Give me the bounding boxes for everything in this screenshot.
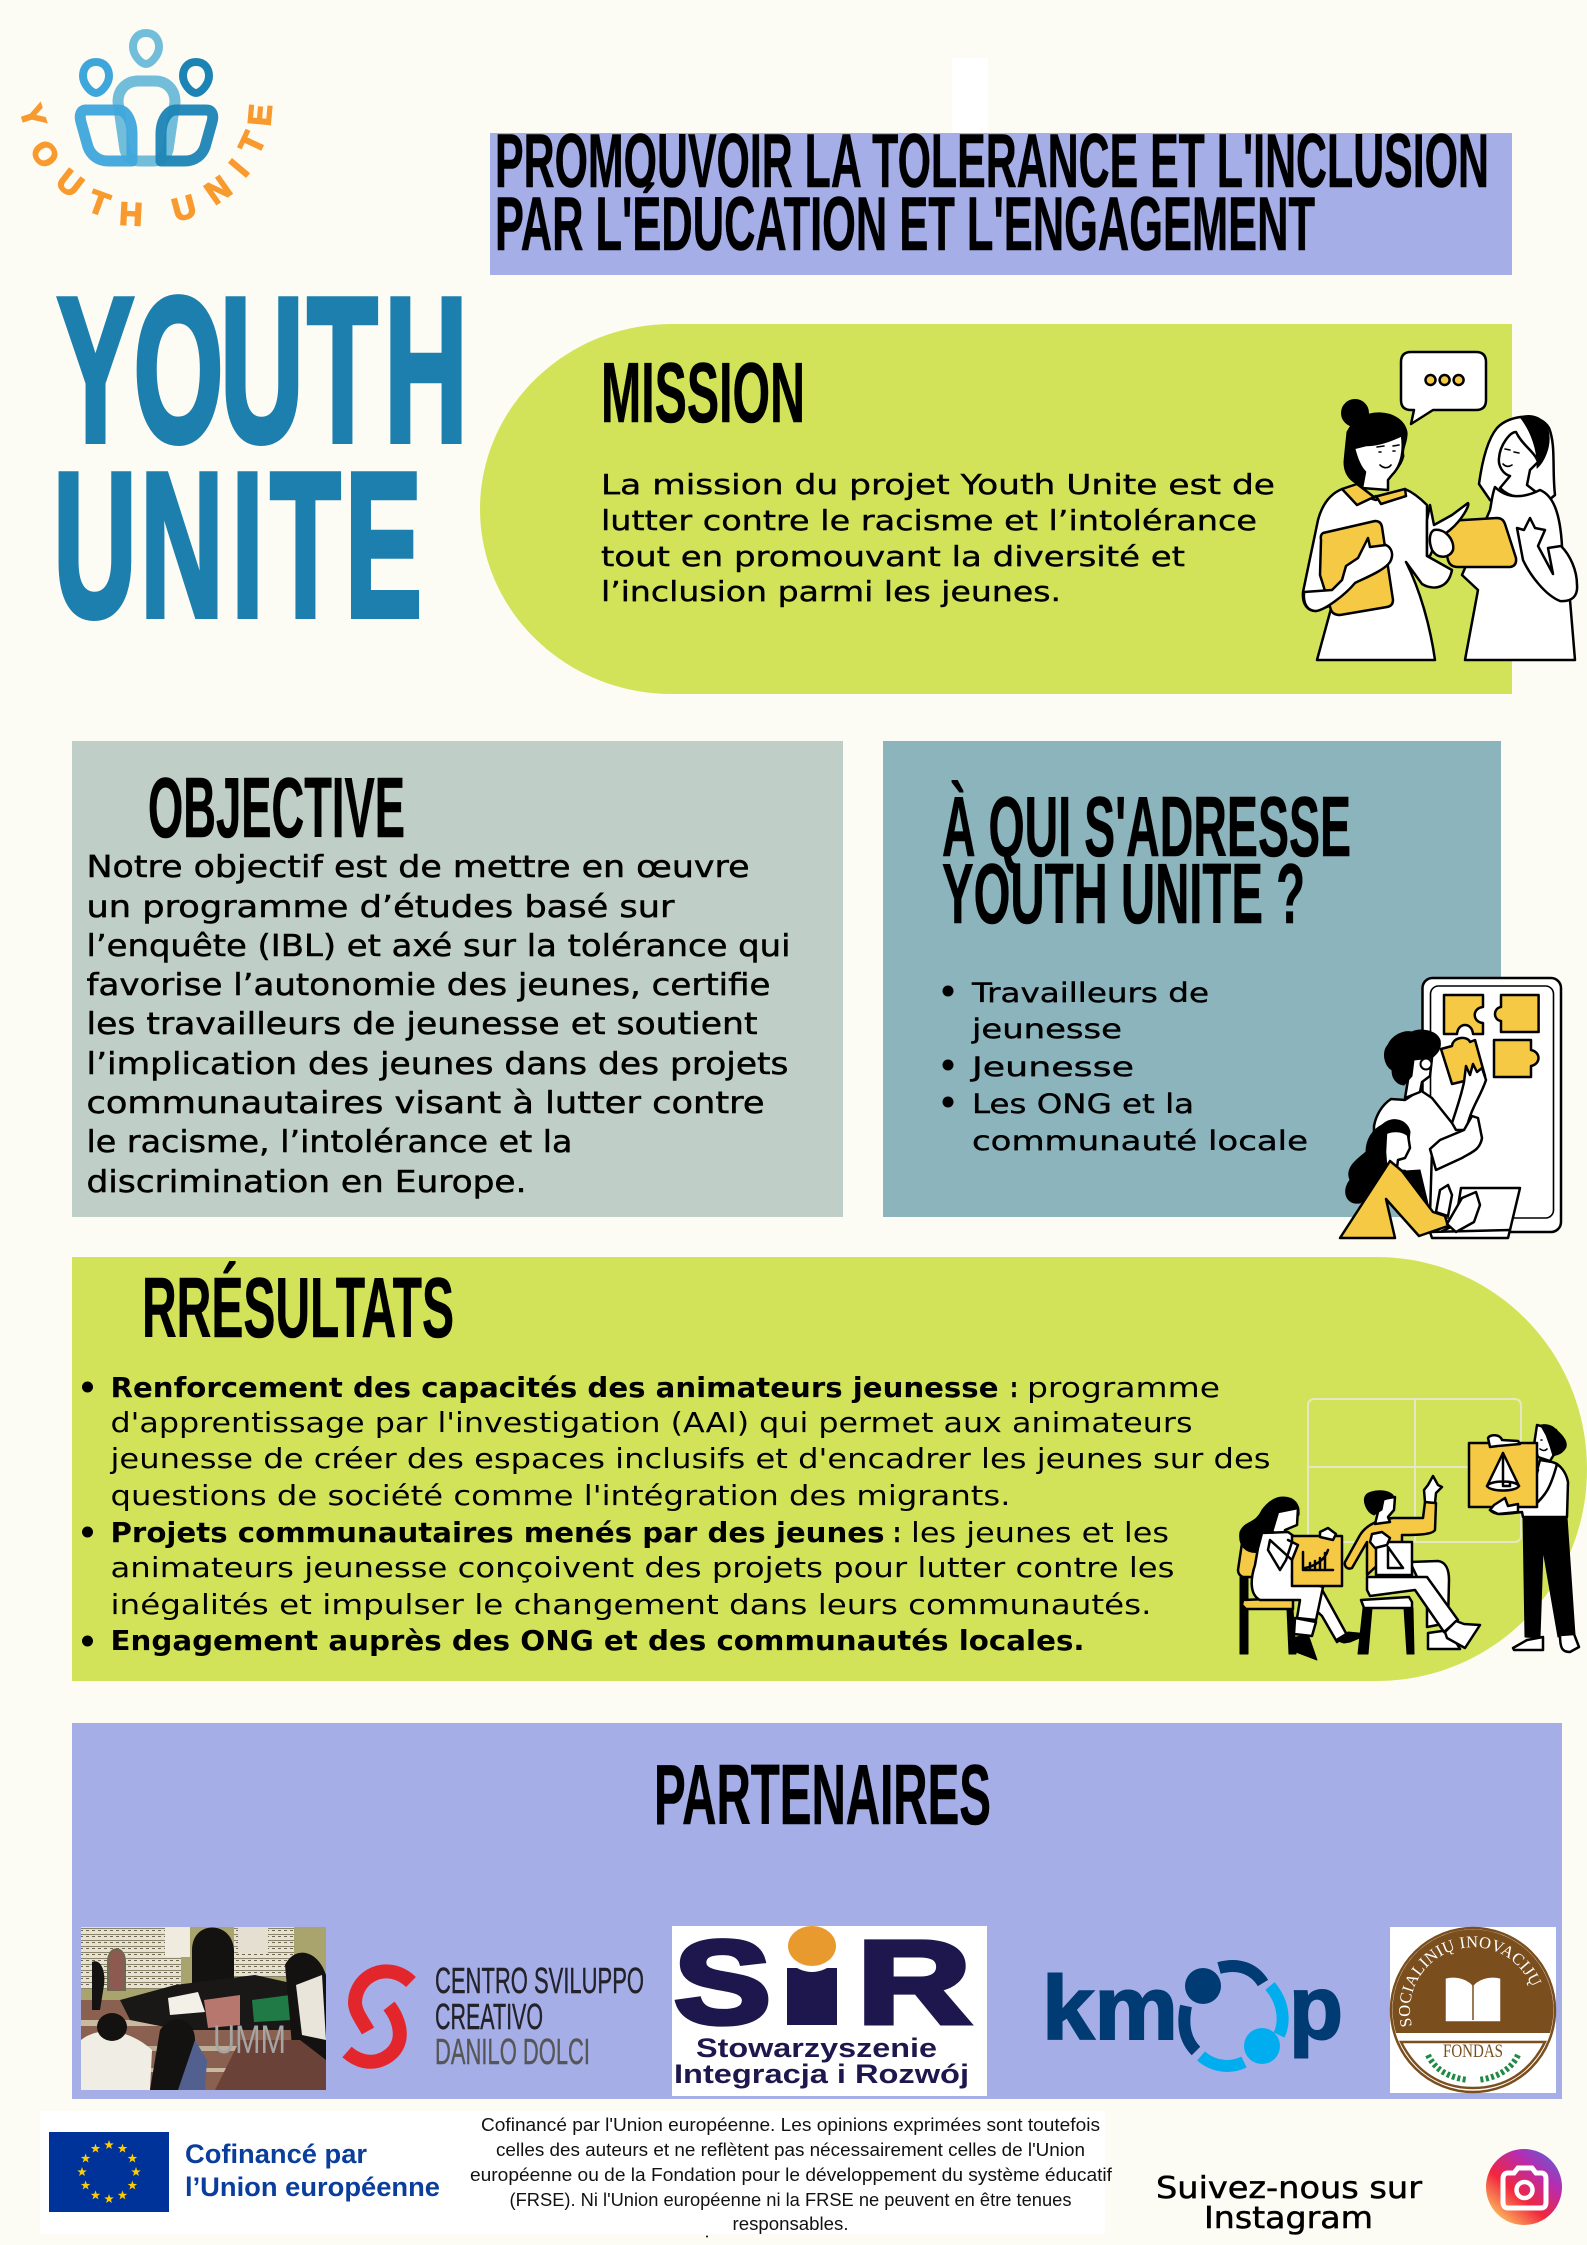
panel: objective: [72, 741, 843, 1217]
objective text: un programme d’études basé sur: [86, 890, 675, 925]
results list: animateurs jeunesse conçoivent des projets pour lutter contre les: [110, 1552, 1174, 1584]
partner logo: Socialinių Inovacijų Fondas: SOCIALINIŲ INOVACIJŲ: [1399, 1936, 1542, 2026]
results list: d'apprentissage par l'investigation (AAI) qui permet aux animateurs: [110, 1407, 1192, 1439]
phone: [1422, 978, 1561, 1232]
panel: mission: [480, 324, 1512, 694]
results list: questions de société comme l'intégration des migrants.: [110, 1480, 1010, 1512]
logo lettering arc: E: [241, 103, 279, 127]
results list: inégalités et impulser le changement dans leurs communautés.: [110, 1589, 1152, 1621]
logo lettering arc: O: [23, 133, 67, 175]
results list: les jeunes et les: [911, 1517, 1169, 1549]
man: [1374, 1030, 1486, 1222]
partners heading: PARTENAIRES: [654, 1748, 991, 1843]
whiteboard grid: [1308, 1399, 1521, 1542]
audience list: Les ONG et la: [972, 1089, 1194, 1120]
audience list: [942, 978, 1308, 1157]
results list: Renforcement des capacités des animateurs jeunesse: [110, 1372, 998, 1404]
logo lettering arc: U: [50, 162, 90, 204]
audience list: Travailleurs de: [971, 978, 1209, 1009]
objective text: le racisme, l’intolérance et la: [86, 1125, 572, 1160]
results list: programme: [1027, 1372, 1220, 1404]
puzzle pieces: [1441, 995, 1539, 1084]
partner logo: UMM photo: UMM: [213, 2018, 286, 2062]
disclaimer: responsables.: [732, 2214, 848, 2234]
woman: [1340, 1120, 1480, 1238]
seated woman: [1238, 1497, 1369, 1660]
objective heading: OBJECTIVE: [148, 761, 405, 856]
panel: results: [72, 1257, 1587, 1681]
objective text: les travailleurs de jeunesse et soutient: [86, 1007, 758, 1042]
partner logo: SIR: R: [857, 1917, 971, 2049]
Instagram call to action: [1156, 2171, 1423, 2236]
EU label: l’Union européenne: [185, 2172, 440, 2202]
right woman: [1440, 416, 1577, 660]
objective text: discrimination en Europe.: [86, 1165, 526, 1200]
partner logo: Socialinių Inovacijų Fondas: FONDAS: [1443, 2041, 1503, 2062]
partner logo: SIR: [672, 1917, 987, 2096]
disclaimer: européenne ou de la Fondation pour le développement du système éducatif: [470, 2165, 1113, 2185]
results list: Engagement auprès des ONG et des communautés locales.: [110, 1625, 1084, 1657]
seated man: [1345, 1476, 1480, 1654]
partner logo: Centro Sviluppo Creativo Danilo Dolci: CENTRO SVILUPPO: [435, 1960, 644, 2001]
partner logo: Socialinių Inovacijų Fondas: [1390, 1926, 1556, 2094]
results list: jeunesse de créer des espaces inclusifs et d'encadrer les jeunes sur des: [109, 1443, 1270, 1475]
objective text: favorise l’autonomie des jeunes, certifie: [86, 968, 770, 1003]
partner logo: KMOP: [1042, 1959, 1343, 2066]
results heading: RRÉSULTATS: [142, 1261, 454, 1356]
partner logo: KMOP: km: [1042, 1959, 1178, 2059]
mission text: lutter contre le racisme et l’intolérance: [601, 504, 1257, 537]
logo lettering arc: I: [222, 153, 256, 183]
standing man: [1469, 1425, 1579, 1652]
partner logo: SIR: Integracja i Rozwój: [674, 2059, 969, 2089]
icon: EU flag: [49, 2132, 169, 2212]
EU label: Cofinancé par: [185, 2139, 367, 2169]
laptop: [1432, 1188, 1520, 1236]
results list: :: [1010, 1372, 1018, 1404]
disclaimer: Cofinancé par l'Union européenne. Les opinions exprimées sont toutefois: [481, 2115, 1100, 2135]
objective text: l’enquête (IBL) et axé sur la tolérance qui: [86, 929, 791, 964]
results list: :: [893, 1517, 901, 1549]
main title: YOUTH UNITE: UNITE: [53, 431, 422, 660]
left woman: [1303, 400, 1468, 660]
EU label: [185, 2139, 440, 2202]
panel: audience: YOUTH UNITE ?: [942, 847, 1305, 942]
mission text: La mission du projet Youth Unite est de: [601, 468, 1275, 501]
partner logo: Centro Sviluppo Creativo Danilo Dolci: DANILO DOLCI: [435, 2031, 590, 2072]
disclaimer: celles des auteurs et ne reflètent pas nécessairement celles de l'Union: [496, 2140, 1085, 2160]
Instagram call to action: Suivez-nous sur: [1156, 2171, 1423, 2206]
logo lettering arc: H: [119, 195, 143, 233]
partner logo: Centro Sviluppo Creativo Danilo Dolci: [347, 1960, 644, 2072]
disclaimer: (FRSE). Ni l'Union européenne ni la FRSE ne peuvent en être tenues: [510, 2190, 1072, 2210]
objective text: l’implication des jeunes dans des projets: [86, 1047, 789, 1082]
partner logo: SIR: S: [674, 1917, 771, 2049]
objective text: Notre objectif est de mettre en œuvre: [86, 850, 750, 885]
partner logo: KMOP: p: [1289, 1959, 1343, 2059]
illustration: puzzle on phone: [1340, 978, 1561, 1238]
disclaimer: [470, 2115, 1113, 2234]
main title: YOUTH UNITE: YOUTH: [57, 256, 468, 485]
mission text: tout en promouvant la diversité et: [601, 540, 1185, 573]
logo lettering arc: T: [232, 126, 273, 159]
partner logo: SIR: Stowarzyszenie: [696, 2033, 937, 2063]
mission text: [601, 468, 1275, 608]
logo: Youth Unite: [13, 33, 279, 233]
objective text: [86, 850, 791, 1200]
mission heading: MISSION: [601, 346, 805, 441]
mission text: l’inclusion parmi les jeunes.: [601, 575, 1061, 608]
main title: YOUTH UNITE: [53, 256, 468, 660]
Instagram call to action: Instagram: [1204, 2201, 1373, 2236]
logo lettering arc: N: [198, 169, 238, 211]
audience list: jeunesse: [971, 1014, 1122, 1045]
icon: Instagram: [1486, 2149, 1562, 2225]
partner logo: Centro Sviluppo Creativo Danilo Dolci: CREATIVO: [435, 1996, 543, 2037]
results list: [82, 1372, 1270, 1657]
audience list: communauté locale: [972, 1126, 1308, 1157]
results list: Projets communautaires menés par des jeunes: [110, 1517, 884, 1549]
icon: three people: [80, 33, 213, 161]
partner logo: UMM photo: [81, 1927, 326, 2090]
speech bubble: [1401, 352, 1486, 424]
illustration: team with charts: [1238, 1399, 1579, 1660]
audience list: Jeunesse: [969, 1052, 1134, 1083]
logo lettering arc: T: [84, 183, 115, 223]
title banner: [490, 119, 1512, 275]
logo lettering arc: Y: [13, 100, 53, 132]
panel: audience: [883, 741, 1501, 1217]
objective text: communautaires visant à lutter contre: [86, 1086, 764, 1121]
panel: partners: [72, 1723, 1562, 2099]
illustration: two women talking: [1303, 352, 1577, 660]
logo lettering arc: [13, 100, 279, 233]
EU co-funding panel: [40, 2111, 1113, 2234]
logo lettering arc: U: [168, 188, 200, 228]
